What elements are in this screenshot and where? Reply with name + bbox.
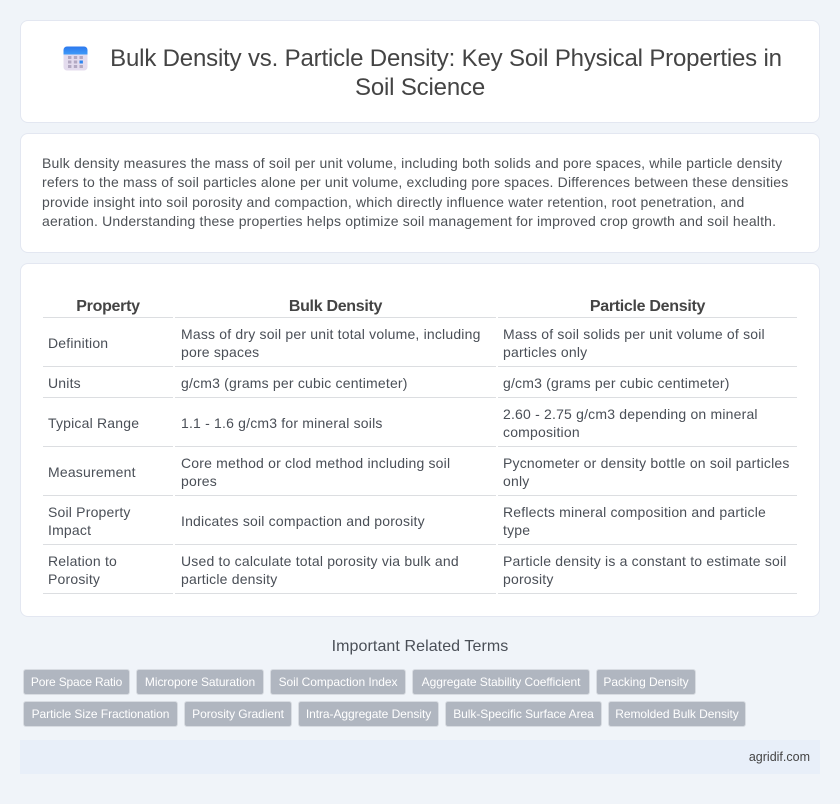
row: soil property impact: type <box>503 522 530 538</box>
tag row 2 <box>23 701 746 727</box>
text block: intro: Bulk density measures the mass of soil per unit volume, including both solids and pore spaces, while particle density <box>42 155 782 171</box>
row: typical range <box>43 406 797 447</box>
tag row 1: Micropore Saturation <box>145 675 255 689</box>
row: relation to porosity: Porosity <box>48 571 100 587</box>
row: relation to porosity: particle density <box>181 571 277 587</box>
row: typical range: 2.60 - 2.75 g/cm3 depending on mineral <box>503 406 758 422</box>
row: relation to porosity: Relation to <box>48 553 117 569</box>
tag row 1: Pore Space Ratio <box>31 675 122 689</box>
table header row <box>43 298 797 318</box>
row: measurement: Core method or clod method including soil <box>181 455 450 471</box>
tag row 1: Aggregate Stability Coefficient <box>422 675 580 689</box>
text block: intro <box>42 155 788 229</box>
tag row 1: Soil Compaction Index <box>279 675 397 689</box>
icon: calendar <box>64 46 88 70</box>
row: measurement: pores <box>181 473 217 489</box>
row: typical range: composition <box>503 424 580 440</box>
title <box>110 45 782 101</box>
title: Soil Science <box>355 74 485 101</box>
row: typical range: 1.1 - 1.6 g/cm3 for mineral soils <box>181 415 383 431</box>
tag row 2: Porosity Gradient <box>192 707 284 721</box>
row: units <box>43 375 797 398</box>
panel: comparison table <box>20 263 820 617</box>
table header row: Bulk Density <box>289 298 382 315</box>
row: soil property impact <box>43 504 797 545</box>
tag row 2: Bulk-Specific Surface Area <box>453 707 594 721</box>
text block: intro: refers to the mass of soil particles alone per unit volume, excluding pore spaces. Differences between these densities <box>42 174 788 190</box>
text block: intro: aeration. Understanding these properties helps optimize soil management for improved crop growth and soil health. <box>42 213 776 229</box>
row: units: g/cm3 (grams per cubic centimeter) <box>181 375 408 391</box>
row: relation to porosity <box>43 553 797 594</box>
row: definition: Mass of dry soil per unit total volume, including <box>181 326 481 342</box>
row: relation to porosity: Particle density is a constant to estimate soil <box>503 553 787 569</box>
term tags <box>23 669 746 727</box>
row: soil property impact: Impact <box>48 522 91 538</box>
row: soil property impact: Reflects mineral composition and particle <box>503 504 766 520</box>
panel: intro paragraph <box>20 133 820 253</box>
row: relation to porosity: Used to calculate total porosity via bulk and <box>181 553 459 569</box>
tag row 1: Packing Density <box>603 675 689 689</box>
row: definition: particles only <box>503 344 587 360</box>
tag row 2: Particle Size Fractionation <box>32 707 169 721</box>
row: soil property impact: Indicates soil compaction and porosity <box>181 513 425 529</box>
panel: header <box>20 20 820 123</box>
footer bar <box>20 740 820 774</box>
row: units: g/cm3 (grams per cubic centimeter) <box>503 375 730 391</box>
tag row 1 <box>23 669 696 695</box>
tag row 2: Remolded Bulk Density <box>615 707 739 721</box>
row: units: Units <box>48 375 81 391</box>
row: definition: Mass of soil solids per unit volume of soil <box>503 326 765 342</box>
row: typical range: Typical Range <box>48 415 139 431</box>
row: measurement: Pycnometer or density bottle on soil particles <box>503 455 790 471</box>
heading: important related terms: Important Related Terms <box>332 638 508 655</box>
table header row: Particle Density <box>590 298 705 315</box>
row: relation to porosity: porosity <box>503 571 554 587</box>
table header row: Property <box>76 298 140 315</box>
title: Bulk Density vs. Particle Density: Key Soil Physical Properties in <box>110 45 782 72</box>
row: measurement: Measurement <box>48 464 136 480</box>
row: soil property impact: Soil Property <box>48 504 131 520</box>
row: definition: Definition <box>48 335 108 351</box>
row: definition: pore spaces <box>181 344 259 360</box>
text block: intro: provide insight into soil porosity and compaction, which directly influence water retention, root penetration, and <box>42 194 744 210</box>
row: measurement: only <box>503 473 529 489</box>
row: definition <box>43 326 797 367</box>
row: measurement <box>43 455 797 496</box>
table grid and cells <box>43 298 797 594</box>
tag row 2: Intra-Aggregate Density <box>306 707 431 721</box>
footer source text: agridif.com <box>749 750 810 764</box>
